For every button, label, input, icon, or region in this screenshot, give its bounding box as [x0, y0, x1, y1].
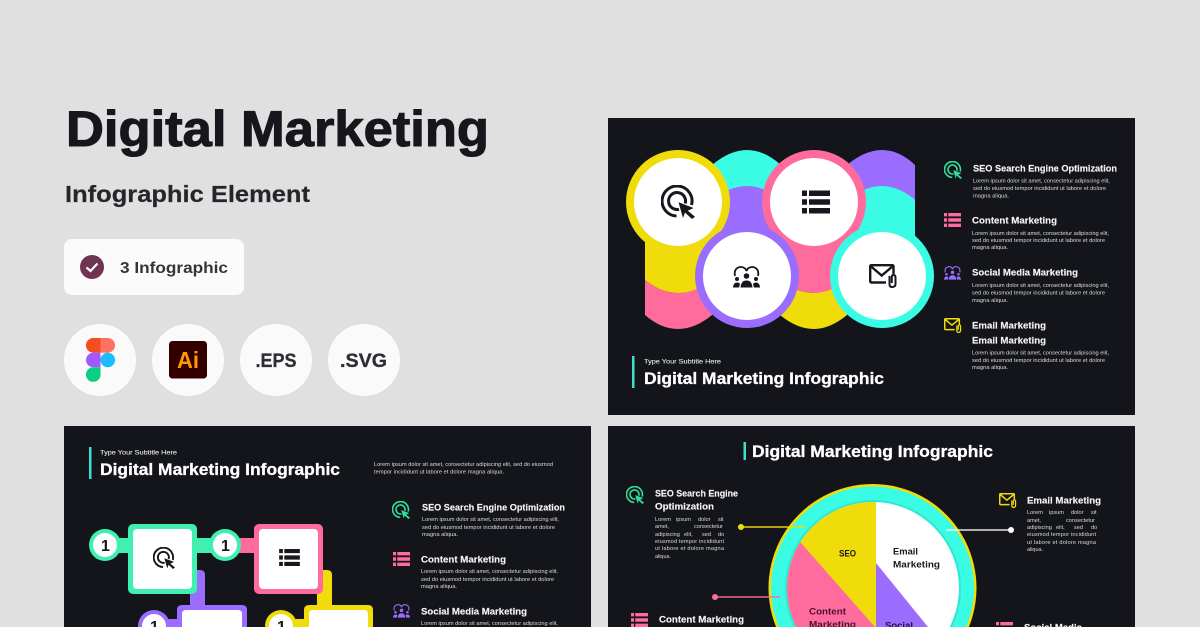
item: email: ut labore et dolore magna	[1027, 540, 1097, 546]
panel: flow infographic	[64, 426, 591, 627]
leader line: content	[712, 594, 780, 600]
heading: Digital Marketing Infographic	[752, 442, 993, 461]
heading: Digital Marketing Infographic	[100, 460, 340, 479]
item: seo: Lorem ipsum dolor sit amet, consectetur adipiscing elit,	[422, 517, 559, 523]
item: email: elit,	[1056, 525, 1065, 531]
icon: figma	[64, 324, 136, 396]
icon: eps: .EPS	[256, 351, 296, 372]
item: email: magna aliqua.	[972, 365, 1008, 371]
item: content: Content Marketing	[659, 614, 744, 626]
item: seo: dolor	[698, 517, 711, 523]
step: email	[265, 605, 373, 627]
item: social: Social Media Marketing	[972, 268, 1078, 278]
heading: Type Your Subtitle Here	[644, 358, 721, 366]
item: seo: eiusmod tempor incididunt	[655, 539, 724, 545]
flow diagram	[89, 524, 373, 627]
heading: Digital Marketing Infographic	[644, 369, 884, 388]
item: social: Social Media Marketing	[421, 606, 527, 618]
item: email: sed	[1074, 525, 1083, 531]
intro text	[374, 462, 553, 476]
pie chart: Marketing	[893, 560, 940, 570]
item: social: Lorem ipsum dolor sit amet, consectetur adipiscing elit,	[972, 283, 1109, 289]
panel: pie infographic	[608, 426, 1135, 627]
item: seo: elit,	[684, 532, 693, 538]
item: content: Content Marketing	[421, 554, 506, 566]
leader line: seo	[738, 524, 805, 530]
item: content: magna aliqua.	[972, 245, 1008, 251]
item: email: ipsum	[1049, 510, 1064, 516]
item: social: sed do eiusmod tempor incididunt ut labore et dolore	[972, 290, 1105, 296]
heading	[632, 356, 884, 388]
icon: svg: .SVG	[340, 351, 387, 372]
subtitle: Infographic Element	[65, 181, 310, 207]
item: email	[945, 319, 1109, 371]
item: seo: consectetur	[694, 524, 723, 530]
item: content: Content Marketing	[972, 216, 1057, 226]
item: seo	[627, 487, 738, 560]
item: seo: do	[718, 532, 724, 538]
item: email	[1000, 494, 1101, 553]
item: seo: amet,	[655, 524, 669, 530]
item: seo: adipiscing	[655, 532, 680, 538]
panel: circles infographic	[608, 118, 1135, 415]
badge: 3 infographic: 3 Infographic	[120, 260, 228, 277]
item: email: dolor	[1071, 510, 1084, 516]
item: content: magna aliqua.	[421, 584, 457, 590]
item: seo: ut labore et dolore magna	[655, 546, 725, 552]
item: social	[944, 267, 1109, 304]
item: email: Email Marketing	[972, 336, 1046, 346]
item: content	[944, 213, 1109, 251]
item: email: sit	[1091, 510, 1097, 516]
wave columns	[645, 150, 915, 329]
connector: purple	[190, 570, 205, 610]
pie chart: Email	[893, 546, 918, 558]
item: seo: sed	[702, 532, 711, 538]
step: seo	[89, 524, 225, 594]
main title: Digital Marketing	[66, 101, 489, 157]
circle: email	[830, 224, 934, 328]
item: content	[631, 613, 744, 627]
item: social: Lorem ipsum dolor sit amet, consectetur adipiscing elit,	[421, 621, 558, 627]
item: email: Lorem	[1027, 510, 1043, 516]
pie chart: SEO	[839, 548, 856, 560]
badge: 3 infographic	[64, 239, 244, 295]
item: seo	[393, 502, 565, 538]
step: content: 1	[221, 538, 230, 555]
heading	[89, 447, 340, 479]
item: email: Lorem ipsum dolor sit amet, consectetur adipiscing elit,	[972, 350, 1109, 356]
item: content: sed do eiusmod tempor incididunt ut labore et dolore	[972, 238, 1105, 244]
circle: social	[695, 224, 799, 328]
item: content: sed do eiusmod tempor incididunt ut labore et dolore	[421, 577, 554, 583]
item: social	[996, 622, 1083, 627]
item: seo: ipsum	[676, 517, 691, 523]
leader line: email	[946, 527, 1014, 533]
item: social: magna aliqua.	[972, 298, 1008, 304]
connector: yellow	[317, 570, 332, 610]
item: seo: sed do eiusmod tempor incididunt ut labore et dolore	[973, 186, 1106, 192]
item: content	[393, 552, 558, 590]
icon: adobe illustrator	[152, 324, 224, 396]
item: email: Email Marketing	[972, 320, 1046, 332]
item: email: adipiscing	[1027, 525, 1052, 531]
item: seo: Lorem	[655, 517, 671, 523]
item: content: Lorem ipsum dolor sit amet, consectetur adipiscing elit,	[421, 569, 558, 575]
step: seo: 1	[101, 538, 110, 555]
step: social	[138, 605, 247, 627]
icon: svg	[328, 324, 400, 396]
item: seo: magna aliqua.	[422, 532, 458, 538]
item: email: do	[1091, 525, 1097, 531]
intro text: Lorem ipsum dolor sit amet, consectetur adipiscing elit, sed do eiusmod	[374, 462, 553, 468]
item: email: amet,	[1027, 518, 1041, 524]
format icons row	[64, 324, 400, 396]
item: seo: SEO Search Engine Optimization	[973, 164, 1117, 174]
step: content	[209, 524, 323, 594]
icon: adobe illustrator: Ai	[177, 347, 199, 373]
circle: seo	[626, 150, 730, 254]
item: seo: sit	[718, 517, 724, 523]
item: email: eiusmod tempor incididunt	[1027, 532, 1096, 538]
item: seo: aliqua.	[655, 554, 671, 560]
item: seo	[945, 162, 1117, 200]
item: email: sed do eiusmod tempor incididunt ut labore et dolore	[972, 358, 1105, 364]
item: seo: SEO Search Engine	[655, 488, 738, 500]
intro text: tempor incididunt ut labore et dolore magna aliqua.	[374, 470, 504, 476]
item: seo: magna aliqua.	[973, 194, 1009, 200]
pie chart: Content	[809, 606, 847, 618]
icon: eps	[240, 324, 312, 396]
item: seo: Optimization	[655, 502, 714, 512]
item: social	[393, 605, 558, 627]
item: content: Lorem ipsum dolor sit amet, consectetur adipiscing elit,	[972, 231, 1109, 237]
pie chart	[760, 484, 977, 627]
item: email: Email Marketing	[1027, 496, 1101, 506]
item: seo: Lorem ipsum dolor sit amet, consectetur adipiscing elit,	[973, 178, 1110, 184]
heading: Type Your Subtitle Here	[100, 450, 177, 456]
item: email: consectetur	[1066, 518, 1095, 524]
circle: content	[762, 150, 866, 254]
item: seo: SEO Search Engine Optimization	[422, 502, 565, 514]
item: seo: sed do eiusmod tempor incididunt ut labore et dolore	[422, 525, 555, 531]
item: email: aliqua.	[1027, 547, 1043, 553]
